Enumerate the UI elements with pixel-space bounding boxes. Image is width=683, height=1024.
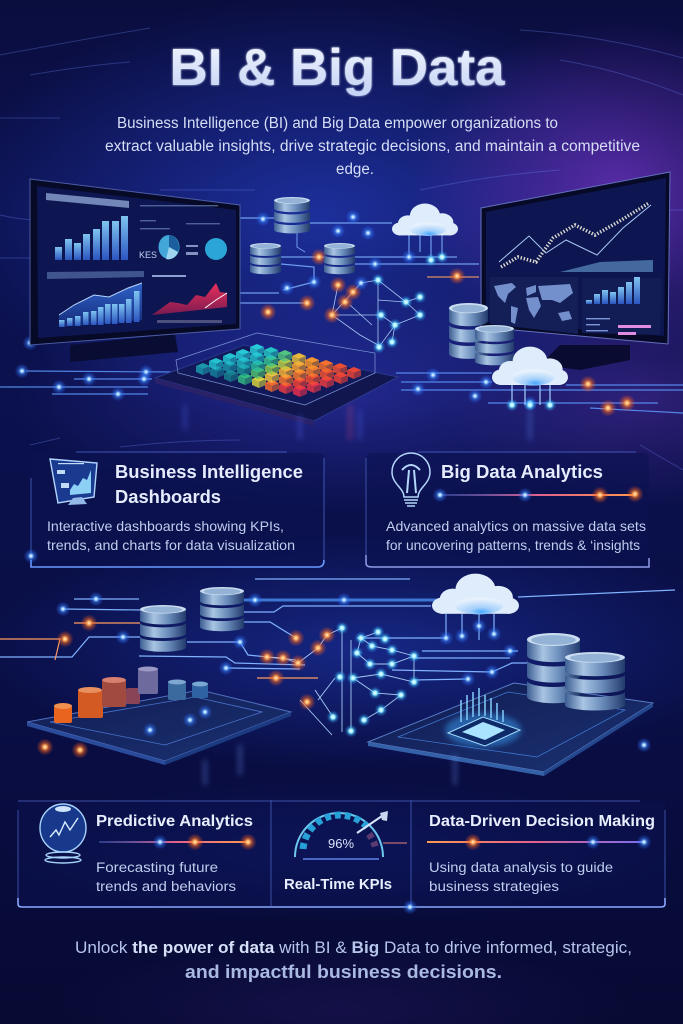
server stack: lower right [527, 633, 625, 710]
neural brain: top [324, 274, 426, 354]
intro paragraph: edge. [336, 161, 374, 178]
intro paragraph [105, 115, 640, 178]
line and candlestick chart [499, 203, 653, 272]
cloud: top [392, 204, 458, 236]
floor reflections [185, 405, 530, 440]
card body text: Interactive dashboards showing KPIs, [47, 518, 284, 534]
heatmap cubes [196, 344, 361, 397]
feature text [96, 860, 236, 894]
panel: lower illustration circuits [0, 579, 675, 735]
chip [445, 688, 521, 747]
floor reflections lower [205, 745, 455, 785]
closing statement: and impactful business decisions. [185, 961, 502, 982]
feature text: business strategies [429, 879, 559, 894]
bar chart: growth [582, 277, 662, 335]
feature heading: Real-Time KPIs [284, 877, 392, 893]
intro paragraph: extract valuable insights, drive strategic decisions, and maintain a competitive [105, 138, 640, 155]
title: BI & Big Data [170, 39, 506, 97]
pie chart [158, 235, 180, 259]
area chart: red [152, 283, 227, 323]
database: lower left [140, 605, 186, 652]
card body text: Advanced analytics on massive data sets [386, 518, 646, 534]
card body text: trends, and charts for data visualization [47, 537, 295, 553]
divider line with nodes [427, 834, 652, 850]
circuit nodes: hero [14, 210, 636, 416]
monitor: analytics right [481, 172, 670, 370]
database: lower centre [200, 587, 244, 631]
feature text: Forecasting future [96, 860, 218, 875]
feature text: trends and behaviors [96, 879, 236, 894]
card heading: Dashboards [115, 487, 221, 507]
area chart: blue [59, 283, 142, 327]
isometric heatmap platform [155, 333, 398, 426]
panel: hero illustration circuits [0, 218, 683, 413]
feature: Predictive Analytics [40, 804, 256, 894]
feature text: Using data analysis to guide [429, 860, 613, 875]
card body text: for uncovering patterns, trends & ‘insights [386, 537, 640, 553]
background streaks [0, 28, 683, 470]
database: mid left [250, 243, 281, 274]
icon: light bulb [392, 453, 430, 506]
donut stat [205, 238, 227, 260]
feature: Data-Driven Decision Making [427, 813, 655, 894]
icon: crystal ball [40, 804, 86, 863]
card heading: Business Intelligence [115, 462, 303, 482]
platform: right with chip [368, 683, 653, 776]
closing statement: Unlock the power of data with BI & Big Data to drive informed, strategic, [75, 938, 632, 957]
cloud: lower section [432, 574, 519, 614]
card body text [47, 518, 295, 553]
monitor: BI dashboard left [30, 179, 240, 362]
circuit nodes: lower [36, 592, 652, 758]
world map panel [490, 277, 578, 334]
gauge value: 96% [328, 836, 354, 851]
platform: left with 3D bars [27, 666, 291, 765]
intro paragraph: Business Intelligence (BI) and Big Data empower organizations to [117, 115, 558, 132]
server stack [449, 303, 514, 365]
feature heading: Predictive Analytics [96, 813, 253, 830]
card heading [115, 462, 303, 507]
divider line with nodes [432, 486, 644, 504]
card body text [386, 518, 646, 553]
card: Big Data Analytics [366, 452, 649, 567]
icon: dashboard monitor [50, 459, 97, 505]
database: top [274, 197, 310, 233]
divider line with nodes [99, 834, 256, 850]
feature heading: Data-Driven Decision Making [429, 813, 655, 830]
closing statement [75, 938, 632, 982]
cloud: lower [492, 347, 568, 412]
panel: bottom features [18, 800, 665, 914]
screen label: KES: KES [139, 250, 157, 260]
feature: Real-Time KPIs [284, 811, 407, 893]
card heading: Big Data Analytics [441, 462, 603, 482]
feature text [429, 860, 613, 894]
database: mid right [324, 243, 355, 274]
card: Business Intelligence Dashboards [24, 452, 324, 567]
bar chart: KPIs [55, 216, 128, 260]
3D bars [54, 666, 208, 723]
